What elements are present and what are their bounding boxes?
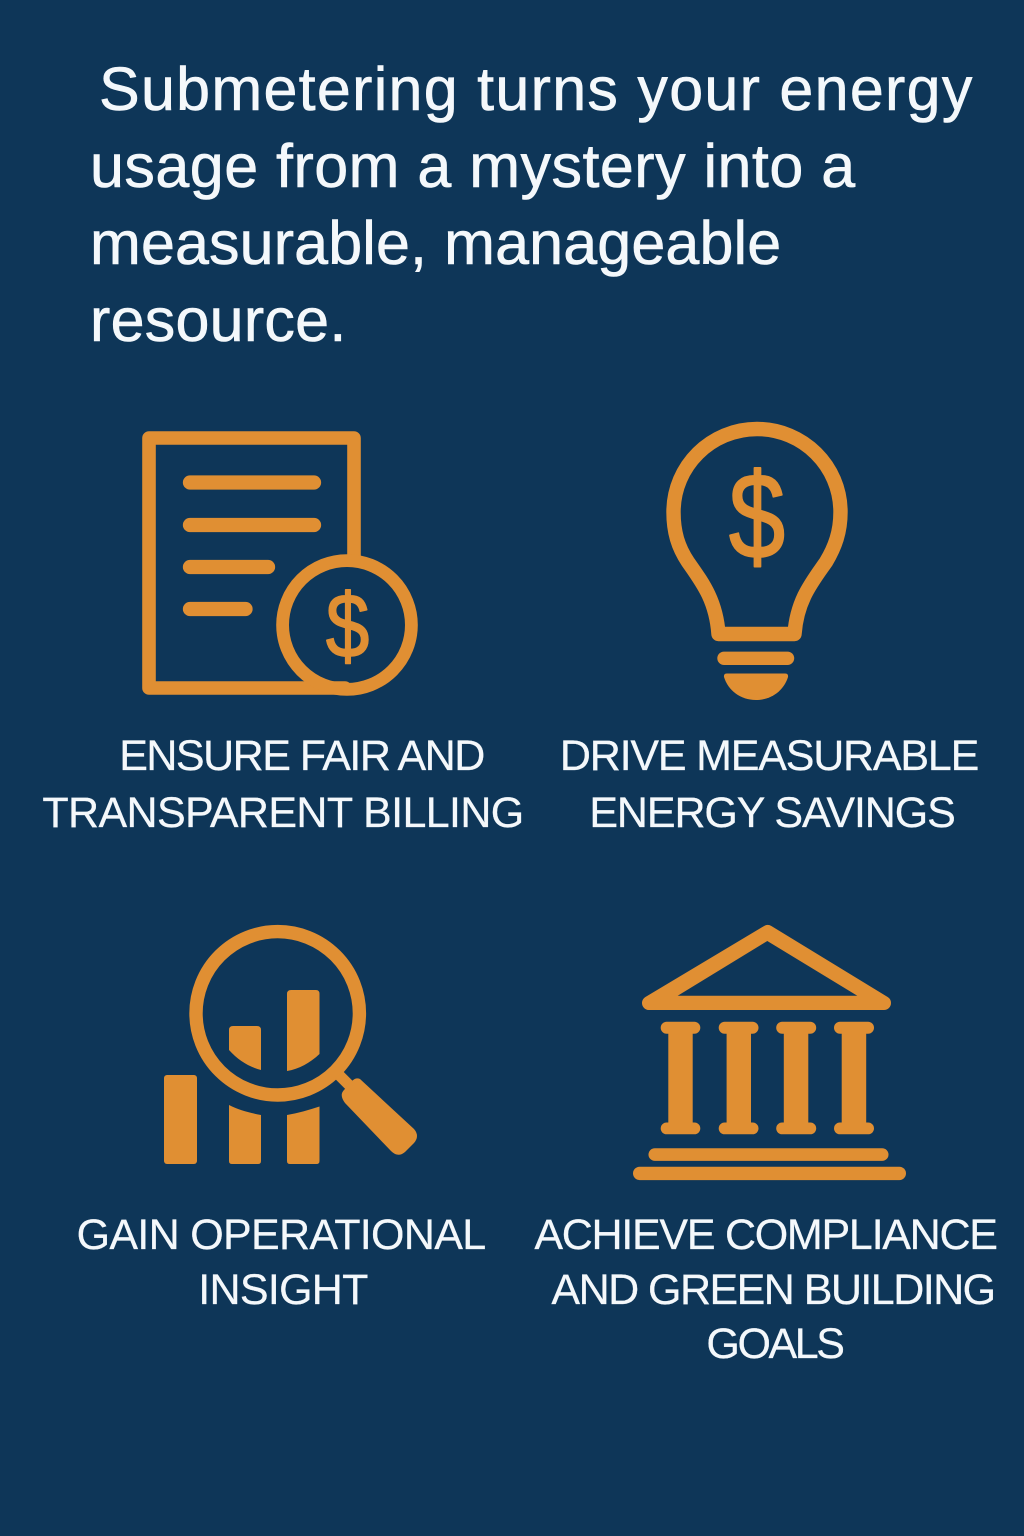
title <box>90 55 974 354</box>
caption: billing: ENSURE FAIR AND <box>119 732 484 780</box>
title: resource. <box>90 286 347 354</box>
caption: compliance: ACHIEVE COMPLIANCE <box>534 1211 997 1259</box>
caption: compliance <box>534 1211 997 1368</box>
caption: insight: INSIGHT <box>198 1266 368 1314</box>
caption: billing: TRANSPARENT BILLING <box>42 788 524 836</box>
caption: insight <box>77 1211 485 1314</box>
caption: savings <box>560 732 978 836</box>
caption: billing <box>42 732 524 836</box>
caption: savings: DRIVE MEASURABLE <box>560 732 978 780</box>
pediment <box>649 932 884 1003</box>
icon: bill with dollar coin: $ <box>326 576 369 676</box>
icon: magnifier over bar chart <box>164 924 417 1164</box>
icon: classical building <box>633 924 906 1180</box>
title: Submetering turns your energy <box>99 55 974 123</box>
caption: insight: GAIN OPERATIONAL <box>77 1211 485 1259</box>
icon: light bulb with dollar: $ <box>729 448 785 584</box>
steps <box>633 1148 906 1180</box>
icon: bill with dollar coin <box>142 431 418 696</box>
caption: savings: ENERGY SAVINGS <box>589 788 955 836</box>
caption: compliance: GOALS <box>706 1320 843 1368</box>
icon: light bulb with dollar <box>666 422 848 700</box>
title: usage from a mystery into a <box>90 132 856 200</box>
columns <box>661 1022 874 1134</box>
caption: compliance: AND GREEN BUILDING <box>551 1266 995 1314</box>
title: measurable, manageable <box>90 209 781 277</box>
